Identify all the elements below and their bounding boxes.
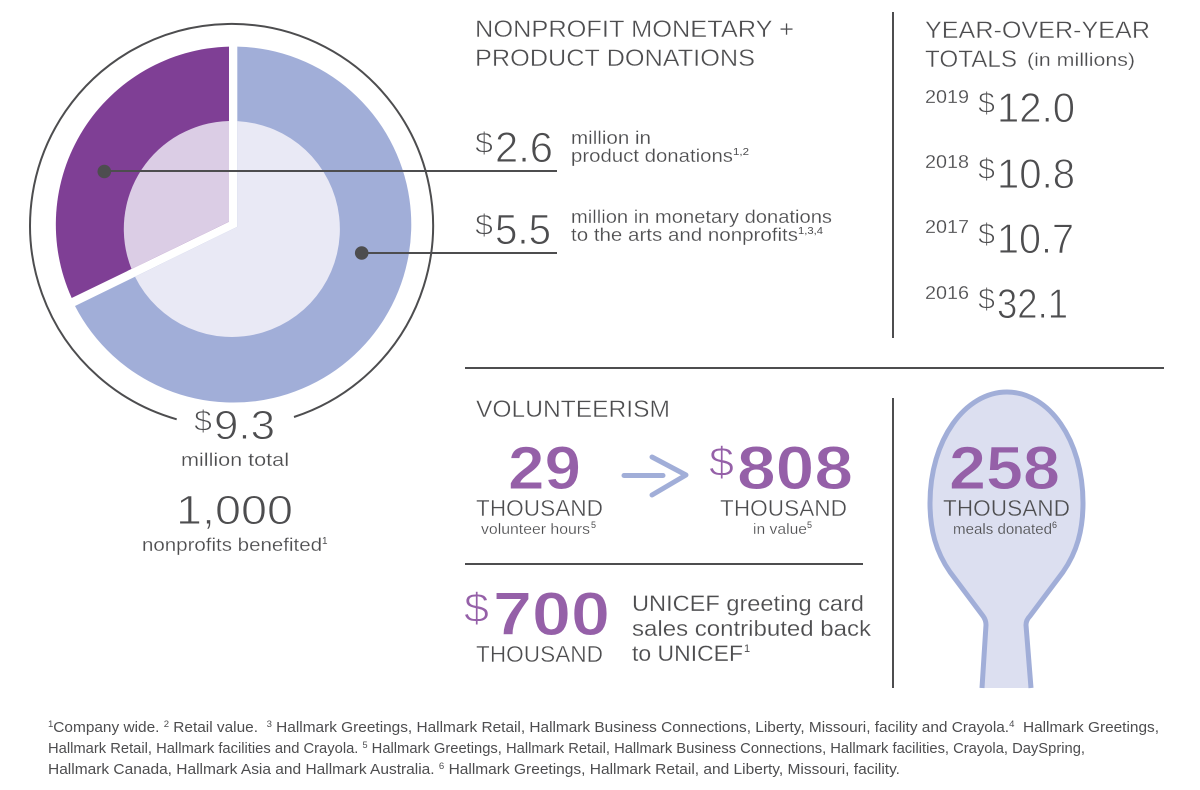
callout line: product donations [98, 165, 557, 178]
row: 2017: $ [978, 218, 995, 251]
heading [925, 17, 1150, 73]
row: 2019: 2019 [925, 87, 969, 107]
callout line: monetary donations [355, 246, 557, 260]
heading: PRODUCT DONATIONS [475, 45, 755, 72]
stat: meals donated: 258 [949, 434, 1060, 502]
product description: 1,2 [733, 147, 749, 158]
product description: million in [571, 128, 651, 148]
panel: volunteerism [476, 396, 853, 538]
stat: volunteer hours: 5 [591, 520, 596, 530]
panel: UNICEF [464, 580, 872, 667]
heading: TOTALS [925, 46, 1017, 73]
row: 2017: 2017 [925, 217, 969, 237]
total amount: 9.3 [214, 402, 275, 448]
row: 2019: 12.0 [997, 84, 1075, 131]
total amount: $ [194, 405, 212, 438]
stat: UNICEF amount: THOUSAND [476, 641, 603, 667]
stat: volunteer hours: 29 [508, 434, 581, 502]
footnotes: Hallmark Retail, Hallmark facilities and Crayola. [48, 741, 353, 757]
footnotes: 3 [267, 719, 272, 729]
stat: volunteer value [709, 434, 853, 538]
row: 2016 [925, 280, 1068, 327]
footnotes: Hallmark Greetings, Hallmark Retail, Hallmark Business Connections, Hallmark facilities, Crayola, DaySpring, [368, 741, 1085, 757]
donut segment: monetary donations [75, 47, 411, 403]
nonprofits label: nonprofits benefited [142, 535, 322, 555]
stat: volunteer hours [476, 434, 603, 538]
product amount: $ [475, 127, 493, 160]
stat: meals donated: THOUSAND [943, 495, 1070, 521]
spoon outline [930, 392, 1083, 688]
donut segment: product donations [56, 47, 229, 298]
stat: meals donated [943, 434, 1070, 538]
inner segment: monetary [135, 121, 340, 337]
heading [475, 16, 794, 72]
UNICEF description: sales contributed back [632, 616, 872, 641]
UNICEF description: to UNICEF [632, 641, 743, 666]
nonprofits label: 1 [322, 536, 328, 547]
heading: (in millions) [1027, 50, 1135, 70]
stat: meals donated: 6 [1052, 520, 1057, 530]
monetary amount: $ [475, 209, 493, 242]
panel: monetary and product donations [98, 16, 832, 260]
stat: UNICEF amount [464, 580, 610, 667]
row: 2017 [925, 215, 1074, 262]
UNICEF description: 1 [744, 643, 750, 655]
footnotes: 1 [48, 719, 53, 729]
stat: UNICEF amount: 700 [493, 580, 610, 648]
arrow [624, 457, 686, 495]
monetary description: 1,3,4 [798, 226, 823, 237]
footnotes: 6 [439, 761, 444, 771]
stat: volunteer value: 808 [737, 434, 853, 502]
monetary description [571, 207, 832, 245]
row: 2018: 10.8 [997, 150, 1075, 197]
stat: volunteer value: 5 [807, 520, 812, 530]
stat: volunteer hours: volunteer hours [481, 521, 590, 538]
panel: donut chart total [30, 24, 433, 555]
footnotes [48, 719, 1159, 778]
panel: meals donated spoon [930, 392, 1083, 688]
row: 2019: $ [978, 87, 995, 120]
UNICEF description [632, 591, 872, 666]
heading: YEAR-OVER-YEAR [925, 17, 1150, 44]
product amount: 2.6 [495, 124, 553, 172]
stat: volunteer value: $ [709, 438, 734, 485]
footnotes: Hallmark Greetings, Hallmark Retail, and Liberty, Missouri, facility. [444, 762, 900, 778]
heading: NONPROFIT MONETARY + [475, 16, 794, 43]
row: 2017: 10.7 [997, 215, 1074, 262]
footnotes: Retail value. [169, 720, 267, 736]
stat: UNICEF amount: $ [464, 584, 489, 631]
outer ring [30, 24, 433, 419]
spoon fill [930, 392, 1083, 688]
footnotes: Hallmark Greetings, [1014, 720, 1159, 736]
monetary amount: 5.5 [495, 206, 551, 254]
row: 2016: $ [978, 283, 995, 316]
row: 2019 [925, 84, 1075, 131]
row: 2018 [925, 150, 1075, 197]
nonprofits count: 1,000 [176, 487, 293, 533]
UNICEF description: UNICEF greeting card [632, 591, 864, 616]
row: 2018: 2018 [925, 152, 969, 172]
product description [571, 128, 749, 166]
stat: volunteer value: THOUSAND [720, 495, 847, 521]
footnotes: Hallmark Greetings, Hallmark Retail, Hallmark Business Connections, Liberty, Missouri, facility and Crayola. [272, 720, 1009, 736]
footnotes: Company wide. [53, 720, 164, 736]
footnotes: 4 [1009, 719, 1014, 729]
stat: volunteer hours: THOUSAND [476, 495, 603, 521]
stat: meals donated: meals donated [953, 521, 1052, 538]
footnotes: 5 [362, 740, 368, 750]
total label: million total [181, 450, 289, 470]
row: 2018: $ [978, 153, 995, 186]
product description: product donations [571, 146, 733, 166]
stat: volunteer value: in value [753, 521, 807, 538]
row: 2016: 32.1 [997, 280, 1068, 327]
panel: year-over-year totals [925, 17, 1150, 327]
row: 2016: 2016 [925, 283, 969, 303]
heading: VOLUNTEERISM [476, 396, 670, 423]
footnotes: Hallmark Canada, Hallmark Asia and Hallmark Australia. [48, 762, 410, 778]
footnotes: 2 [164, 719, 169, 729]
monetary description: to the arts and nonprofits [571, 225, 798, 245]
monetary description: million in monetary donations [571, 207, 832, 227]
inner segment: product [124, 121, 229, 269]
